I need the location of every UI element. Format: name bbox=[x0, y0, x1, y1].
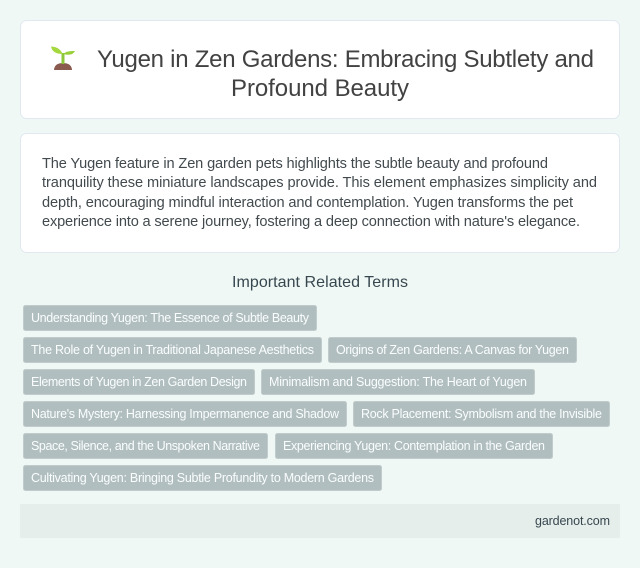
tag bbox=[354, 402, 610, 426]
tag: Elements of Yugen in Zen Garden Design bbox=[31, 375, 247, 389]
tag: Minimalism and Suggestion: The Heart of Yugen bbox=[269, 375, 527, 389]
tag bbox=[24, 466, 382, 490]
footer credit: gardenot.com bbox=[535, 514, 610, 528]
title: Profound Beauty bbox=[231, 75, 409, 102]
description text: depth, encouraging mindful interaction and contemplation. Yugen transforms the pet bbox=[42, 195, 573, 211]
tag bbox=[276, 434, 552, 458]
tag bbox=[328, 338, 576, 362]
tag: Rock Placement: Symbolism and the Invisible bbox=[361, 407, 602, 421]
description text: The Yugen feature in Zen garden pets highlights the subtle beauty and profound bbox=[42, 156, 548, 172]
tag bbox=[24, 306, 316, 330]
tag bbox=[24, 434, 268, 458]
description text: tranquility these miniature landscapes provide. This element emphasizes simplicity and bbox=[42, 175, 597, 191]
tag: Origins of Zen Gardens: A Canvas for Yugen bbox=[336, 343, 569, 357]
tag: Space, Silence, and the Unspoken Narrative bbox=[31, 439, 260, 453]
related term tags bbox=[24, 306, 610, 490]
panel: description bbox=[20, 134, 620, 252]
tag: Nature's Mystery: Harnessing Impermanence and Shadow bbox=[31, 407, 340, 421]
heading: related terms: Important Related Terms bbox=[232, 274, 408, 291]
tag: Cultivating Yugen: Bringing Subtle Profundity to Modern Gardens bbox=[31, 471, 374, 485]
icon: sprout bbox=[51, 46, 75, 70]
tag: Experiencing Yugen: Contemplation in the Garden bbox=[283, 439, 545, 453]
panel: header card bbox=[20, 20, 620, 118]
title: Yugen in Zen Gardens: Embracing Subtlety and bbox=[97, 46, 594, 73]
title bbox=[97, 46, 594, 102]
description text bbox=[42, 156, 597, 230]
tag: Understanding Yugen: The Essence of Subtle Beauty bbox=[31, 311, 310, 325]
footer bbox=[20, 504, 620, 538]
description text: experience into a serene journey, fostering a deep connection with nature's elegance. bbox=[42, 214, 580, 230]
tag bbox=[24, 338, 322, 362]
tag: The Role of Yugen in Traditional Japanese Aesthetics bbox=[31, 343, 314, 357]
tag bbox=[24, 402, 346, 426]
tag bbox=[262, 370, 534, 394]
tag bbox=[24, 370, 254, 394]
